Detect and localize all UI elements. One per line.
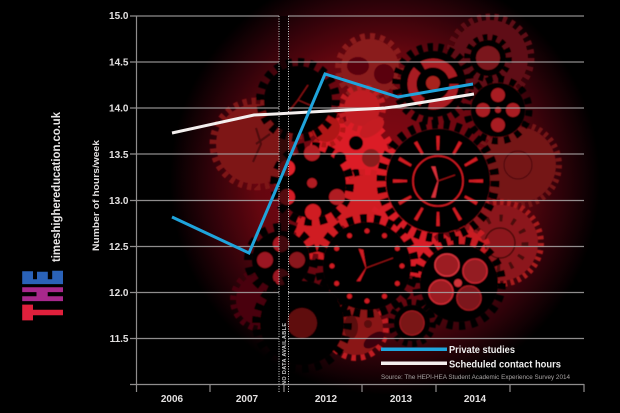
- black gear: small bottom: [391, 302, 433, 344]
- legend: Private studies: [449, 345, 515, 356]
- black gear: trefoil blobs: [416, 240, 502, 326]
- dim gear: bottom right clock: [459, 202, 541, 284]
- THE logo: [14, 271, 72, 320]
- y axis labels: 12.0: [109, 288, 129, 299]
- bright gear: between clocks: [388, 225, 442, 279]
- y axis labels: 15.0: [109, 11, 129, 22]
- dim gear: left: [213, 101, 299, 187]
- y axis labels: 12.5: [109, 242, 129, 253]
- x axis labels: 2006: [161, 394, 184, 405]
- bright gear: centre: [311, 119, 393, 201]
- bright gear: small upper: [341, 87, 387, 142]
- line: private studies: [172, 74, 473, 253]
- black gear: clock with dots: [319, 218, 415, 314]
- black gear: big clock: [381, 124, 495, 238]
- gear: bottom with blobs: [326, 298, 387, 358]
- black gear: top with red ring: [396, 47, 470, 121]
- source note: Source: The HEPI-HEA Student Academic Experience Survey 2014: [381, 374, 570, 381]
- y axis labels: 13.5: [109, 150, 129, 161]
- no data band: [279, 16, 289, 393]
- y axis labels: 14.5: [109, 58, 129, 68]
- dim gear: far right clock: [477, 124, 559, 206]
- black gear: right with four circles: [467, 79, 529, 141]
- bright gear: behind blobs gear: [442, 227, 488, 273]
- black gear: small top right: [467, 37, 509, 79]
- legend: [381, 345, 561, 370]
- black gear: dark lower centre: [256, 277, 348, 369]
- x axis labels: 2007: [236, 394, 259, 405]
- y axis labels: 11.5: [110, 334, 129, 345]
- y axis title: Number of hours/week: [91, 139, 102, 251]
- dim gear: heart shaped top centre: [338, 36, 402, 100]
- bright gear: behind large black gear, lower: [293, 207, 343, 257]
- y axis labels: 13.0: [109, 196, 129, 207]
- gear illustration: [213, 17, 559, 369]
- no data band: NO DATA AVAILABLE: [282, 323, 288, 385]
- bright gear: bottom centre: [332, 172, 398, 238]
- x axis labels: 2013: [390, 394, 413, 405]
- x axis labels: [161, 394, 487, 405]
- black gear: lower left with circles: [248, 227, 314, 293]
- bright gear: right of bottom centre: [372, 199, 418, 245]
- x axis labels: 2014: [464, 394, 487, 405]
- legend: Scheduled contact hours: [449, 360, 561, 370]
- line: scheduled contact hours: [172, 94, 474, 133]
- grid lines and axes: [130, 16, 584, 392]
- bright gear: left centre: [309, 111, 343, 145]
- dim gear: lower left: [233, 271, 291, 329]
- THE logo: E: [14, 271, 72, 284]
- red background glow: [130, 0, 610, 413]
- dim gear: top right: [449, 17, 531, 99]
- black gear: with red circles, centre left: [274, 145, 350, 222]
- THE logo: T: [14, 305, 72, 320]
- website url: timeshighereducation.co.uk: [49, 112, 63, 262]
- x axis labels: 2012: [315, 394, 338, 405]
- THE logo: H: [14, 287, 72, 302]
- y axis labels: 14.0: [109, 104, 129, 114]
- y axis labels: [109, 11, 129, 345]
- black gear: with thin clock, top left: [260, 62, 336, 138]
